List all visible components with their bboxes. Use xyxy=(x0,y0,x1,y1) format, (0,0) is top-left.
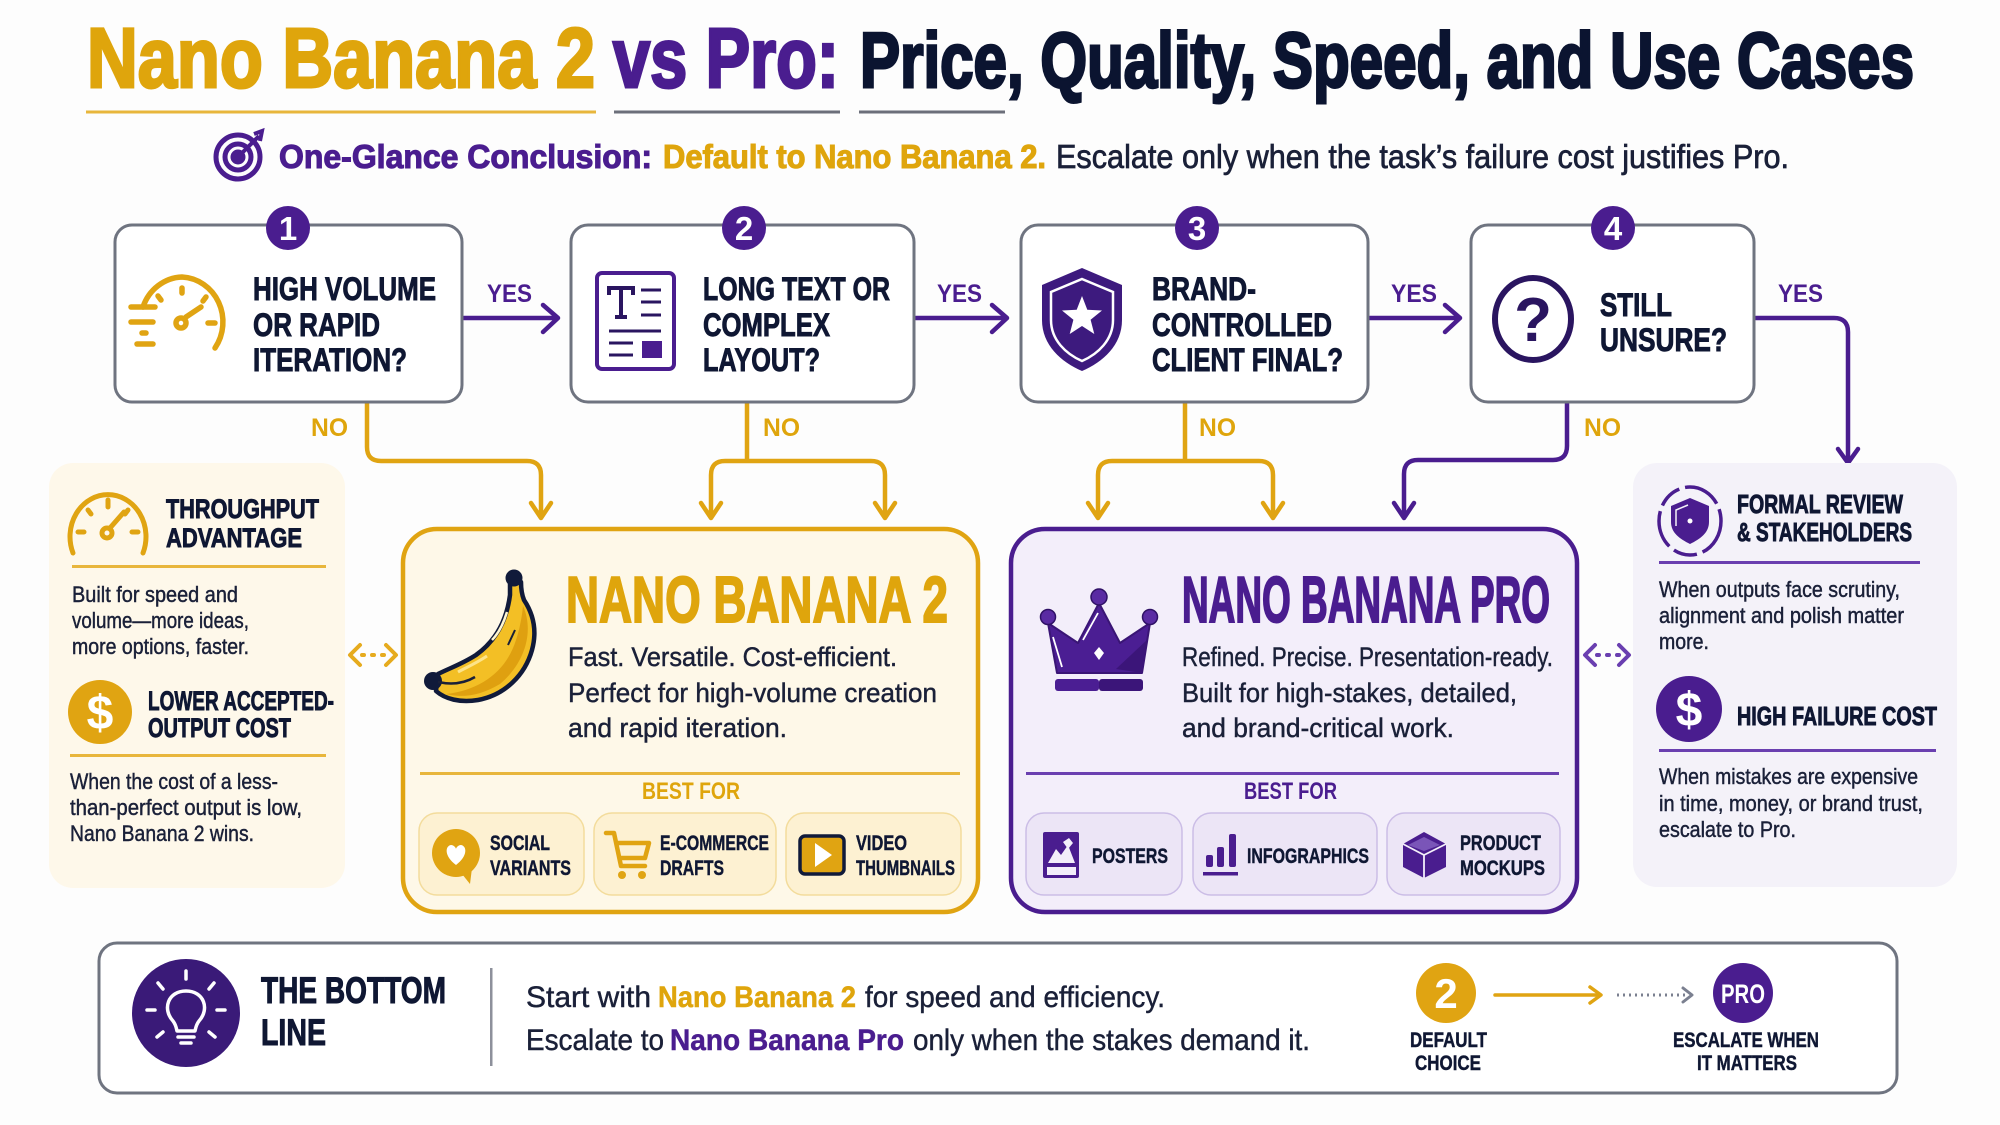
heading: Nano Banana Pro: NANO BANANA PRO xyxy=(1182,563,1550,636)
question text: STILL xyxy=(1600,287,1672,323)
text: throughput body: Built for speed and xyxy=(72,582,238,607)
text: bottom line message: for speed and efficiency. xyxy=(865,981,1165,1014)
text: bottom line message: only when the stakes demand it. xyxy=(913,1024,1310,1057)
badge: default 2: 2 xyxy=(1434,970,1458,1017)
text: formal review body: alignment and polish matter xyxy=(1659,603,1904,628)
icon: dollar coin: $ xyxy=(1676,684,1703,737)
text: formal review body: When outputs face scrutiny, xyxy=(1659,577,1900,602)
question text: OR RAPID xyxy=(253,307,380,343)
no label 3: NO xyxy=(1199,414,1236,442)
text: Nano Banana Pro description: Built for high-stakes, detailed, xyxy=(1182,678,1517,708)
text: bottom line message: Start with xyxy=(526,981,651,1014)
question text: LONG TEXT OR xyxy=(703,271,890,307)
text: failure cost body xyxy=(1659,764,1923,842)
text: Nano Banana 2 description: and rapid iteration. xyxy=(568,713,787,743)
question text: CLIENT FINAL? xyxy=(1152,342,1343,378)
icon: dollar coin xyxy=(68,680,132,744)
conclusion line: One-Glance Conclusion: xyxy=(279,138,652,175)
panel: question 2 xyxy=(571,206,914,402)
question text: UNSURE? xyxy=(1600,322,1727,358)
yes label 3: YES xyxy=(1391,280,1437,308)
panel: Nano Banana 2 xyxy=(403,529,978,912)
badge 2 xyxy=(722,206,766,250)
icon: dollar coin xyxy=(1656,676,1722,742)
heading: formal review xyxy=(1737,489,1912,547)
panel: left benefits xyxy=(49,463,345,888)
heading: high failure cost: HIGH FAILURE COST xyxy=(1737,701,1937,731)
question text xyxy=(1152,271,1343,378)
heading: formal review: & STAKEHOLDERS xyxy=(1737,517,1912,547)
no label 2: NO xyxy=(763,414,800,442)
question text: HIGH VOLUME xyxy=(253,271,436,307)
question text xyxy=(1600,287,1727,358)
chip: infographics: INFOGRAPHICS xyxy=(1247,845,1369,868)
text: formal review body: more. xyxy=(1659,629,1709,654)
no label 1: NO xyxy=(311,414,348,442)
panel: Nano Banana Pro xyxy=(1011,529,1577,912)
conclusion line: Escalate only when the task’s failure cost justifies Pro. xyxy=(1056,138,1789,175)
text: lower cost body xyxy=(70,769,302,846)
heading: formal review: FORMAL REVIEW xyxy=(1737,489,1903,519)
panel: bottom line xyxy=(99,943,1897,1093)
text: Nano Banana 2 description: Fast. Versatile. Cost-efficient. xyxy=(568,642,897,672)
text: failure cost body: in time, money, or brand trust, xyxy=(1659,791,1923,816)
text: bottom line message xyxy=(526,981,1310,1057)
chip: video thumbnails: VIDEO xyxy=(856,832,907,855)
title: Nano Banana 2 xyxy=(87,11,595,105)
title xyxy=(86,11,1914,114)
label: default choice: CHOICE xyxy=(1415,1052,1481,1075)
text: failure cost body: When mistakes are expensive xyxy=(1659,764,1918,789)
label: default choice: DEFAULT xyxy=(1410,1029,1487,1052)
question text: ITERATION? xyxy=(253,342,407,378)
icon: throughput gauge xyxy=(70,495,146,553)
icon: speed gauge xyxy=(131,277,223,348)
chip: posters: POSTERS xyxy=(1092,845,1168,868)
badge 4 xyxy=(1591,206,1635,250)
panel: question 1 xyxy=(115,206,462,402)
text: Nano Banana 2 description: Perfect for high-volume creation xyxy=(568,678,937,708)
flow arrows: yes xyxy=(464,305,1858,463)
text: Nano Banana 2 description xyxy=(568,642,937,743)
label: escalate when it matters xyxy=(1673,1029,1819,1075)
chip: social variants: SOCIAL xyxy=(490,832,550,855)
icon: question mark: ? xyxy=(1514,286,1552,355)
arrow: right double dashed xyxy=(1585,645,1629,665)
heading: throughput: THROUGHPUT xyxy=(166,494,319,524)
arrow: gold xyxy=(1495,987,1601,1003)
heading: throughput: ADVANTAGE xyxy=(166,523,302,553)
badge 1: 1 xyxy=(279,210,297,247)
title: vs Pro: xyxy=(613,11,839,105)
icon: dollar coin: $ xyxy=(87,687,114,740)
arrow: left double dashed xyxy=(350,645,396,665)
heading: lower cost: OUTPUT COST xyxy=(148,713,291,743)
question text xyxy=(253,271,436,378)
chip: social variants: VARIANTS xyxy=(490,857,571,880)
yes label 1: YES xyxy=(487,280,532,308)
label: default choice xyxy=(1410,1029,1487,1075)
chip: infographics xyxy=(1193,813,1377,895)
icon: shield ring xyxy=(1659,487,1721,555)
no label 4: NO xyxy=(1584,414,1621,442)
chip: e-commerce drafts xyxy=(594,813,776,895)
badge 4: 4 xyxy=(1604,210,1623,247)
badge 1 xyxy=(266,206,310,250)
label: escalate when it matters: IT MATTERS xyxy=(1697,1052,1797,1075)
badge 3 xyxy=(1175,206,1219,250)
text: Nano Banana Pro description: and brand-critical work. xyxy=(1182,713,1454,743)
text: Nano Banana Pro description xyxy=(1182,642,1553,743)
chip: product mockups xyxy=(1387,813,1560,895)
badge: pro xyxy=(1713,963,1773,1023)
chip: posters xyxy=(1026,813,1182,895)
conclusion line xyxy=(216,131,1789,179)
text: lower cost body: than-perfect output is low, xyxy=(70,795,302,820)
conclusion line: Default to Nano Banana 2. xyxy=(663,138,1046,175)
text: lower cost body: Nano Banana 2 wins. xyxy=(70,821,254,846)
chip: product mockups: PRODUCT xyxy=(1460,832,1541,855)
chip: video thumbnails xyxy=(786,813,961,895)
panel: question 3 xyxy=(1021,206,1368,402)
heading: best for: BEST FOR xyxy=(1244,778,1337,805)
icon: banana xyxy=(424,570,534,701)
panel: question 4 xyxy=(1471,206,1754,402)
chip: social variants xyxy=(419,813,584,895)
heading: the bottom line xyxy=(261,970,446,1053)
heading: lower cost xyxy=(148,686,334,743)
icon: question mark xyxy=(1495,278,1571,360)
badge: default 2 xyxy=(1416,963,1476,1023)
question text: CONTROLLED xyxy=(1152,307,1332,343)
icon: crown xyxy=(1040,589,1158,691)
text: bottom line message: Nano Banana Pro xyxy=(670,1024,904,1057)
chip: e-commerce drafts: E-COMMERCE xyxy=(660,832,769,855)
heading: throughput xyxy=(166,494,319,553)
heading: the bottom line: LINE xyxy=(261,1012,326,1053)
badge: pro: PRO xyxy=(1721,979,1765,1009)
icon: light bulb xyxy=(132,959,240,1067)
yes label 4: YES xyxy=(1778,280,1823,308)
text: Nano Banana Pro description: Refined. Precise. Presentation-ready. xyxy=(1182,642,1553,672)
badge 3: 3 xyxy=(1188,210,1206,247)
yes label 2: YES xyxy=(937,280,982,308)
text: throughput body: more options, faster. xyxy=(72,634,249,659)
flow arrows: no xyxy=(367,403,1567,518)
text: formal review body xyxy=(1659,577,1904,654)
icon: target xyxy=(216,131,262,179)
heading: Nano Banana 2: NANO BANANA 2 xyxy=(566,563,948,636)
question text: LAYOUT? xyxy=(703,342,820,378)
chip: video thumbnails: THUMBNAILS xyxy=(856,857,955,880)
question text: COMPLEX xyxy=(703,307,831,343)
badge 2: 2 xyxy=(735,210,753,247)
chip: e-commerce drafts: DRAFTS xyxy=(660,857,724,880)
question text xyxy=(703,271,890,378)
chip: product mockups: MOCKUPS xyxy=(1460,857,1545,880)
arrow: dotted escalate xyxy=(1617,988,1692,1002)
text: bottom line message: Nano Banana 2 xyxy=(658,981,856,1014)
label: escalate when it matters: ESCALATE WHEN xyxy=(1673,1029,1819,1052)
icon: document layout xyxy=(597,273,674,369)
text: throughput body xyxy=(72,582,249,659)
question text: BRAND- xyxy=(1152,271,1256,307)
heading: lower cost: LOWER ACCEPTED- xyxy=(148,686,334,716)
text: throughput body: volume—more ideas, xyxy=(72,608,249,633)
text: failure cost body: escalate to Pro. xyxy=(1659,817,1796,842)
heading: best for: BEST FOR xyxy=(642,778,740,805)
panel: right reasons xyxy=(1633,463,1957,887)
text: bottom line message: Escalate to xyxy=(526,1024,664,1057)
icon: brand shield xyxy=(1042,268,1122,371)
text: lower cost body: When the cost of a less- xyxy=(70,769,278,794)
heading: the bottom line: THE BOTTOM xyxy=(261,970,446,1011)
